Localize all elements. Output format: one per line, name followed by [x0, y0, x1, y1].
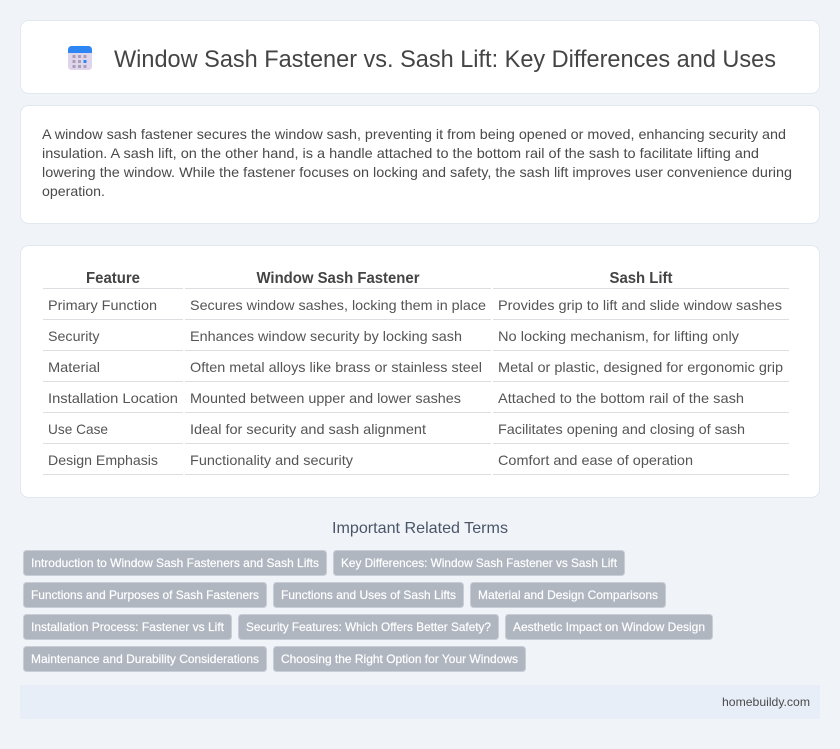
- icon: calendar window: [68, 46, 92, 70]
- footer source text: homebuildy.com: [722, 695, 810, 709]
- table header: [86, 270, 672, 287]
- tag: [506, 614, 712, 640]
- tag: [24, 582, 266, 608]
- tag: [274, 582, 464, 608]
- table row: design emphasis: Comfort and ease of operation: [498, 452, 693, 468]
- panel: comparison table: [20, 246, 820, 498]
- table header: Sash Lift: [610, 270, 672, 287]
- tag: [470, 582, 666, 608]
- tag: Functions and Purposes of Sash Fasteners: [31, 588, 259, 602]
- table row: primary function: [48, 297, 782, 313]
- tag: [334, 550, 624, 576]
- tag: Functions and Uses of Sash Lifts: [281, 588, 456, 602]
- table row: primary function: Primary Function: [48, 297, 157, 313]
- text block: introduction paragraph: insulation. A sash lift, on the other hand, is a handle attached to the bottom rail of the sash to facilitate lifting and: [42, 145, 759, 161]
- table header: Feature: [86, 270, 140, 287]
- table row: security: No locking mechanism, for lifting only: [498, 328, 739, 344]
- table row: installation location: Installation Location: [48, 390, 178, 406]
- tag: Security Features: Which Offers Better Safety?: [246, 620, 491, 634]
- table row: material: Often metal alloys like brass or stainless steel: [190, 359, 482, 375]
- text block: introduction paragraph: [42, 126, 792, 199]
- table header: Window Sash Fastener: [256, 270, 420, 287]
- table row: material: [48, 359, 783, 375]
- footer: [20, 685, 820, 719]
- table row: design emphasis: Functionality and security: [190, 452, 353, 468]
- tag: Key Differences: Window Sash Fastener vs Sash Lift: [341, 556, 618, 570]
- tag: [24, 614, 232, 640]
- heading: important related terms: Important Related Terms: [332, 520, 508, 537]
- table row: use case: Use Case: [48, 421, 108, 437]
- tag: [238, 614, 498, 640]
- tag: Installation Process: Fastener vs Lift: [31, 620, 225, 634]
- tag: Choosing the Right Option for Your Windows: [281, 652, 518, 666]
- tag: Maintenance and Durability Considerations: [31, 652, 259, 666]
- table row: material: Material: [48, 359, 100, 375]
- tag: [24, 550, 326, 576]
- text block: introduction paragraph: A window sash fastener secures the window sash, preventing it from being opened or moved, enhancing security and: [42, 126, 786, 142]
- tag: Material and Design Comparisons: [478, 588, 658, 602]
- tag: [274, 646, 526, 672]
- tag: Introduction to Window Sash Fasteners and Sash Lifts: [31, 556, 319, 570]
- tag: Aesthetic Impact on Window Design: [513, 620, 705, 634]
- table row: primary function: Secures window sashes, locking them in place: [190, 297, 486, 313]
- table row: design emphasis: Design Emphasis: [48, 452, 158, 468]
- table row: security: Security: [48, 328, 100, 344]
- table row: use case: Ideal for security and sash alignment: [190, 421, 426, 437]
- panel: header: [20, 20, 820, 94]
- text block: introduction paragraph: operation.: [42, 183, 105, 199]
- table row: primary function: Provides grip to lift and slide window sashes: [498, 297, 782, 313]
- table row: material: Metal or plastic, designed for ergonomic grip: [498, 359, 783, 375]
- table row: installation location: Attached to the bottom rail of the sash: [498, 390, 744, 406]
- table row: use case: Facilitates opening and closing of sash: [498, 421, 745, 437]
- table row: use case: [48, 421, 745, 437]
- tag: [24, 646, 266, 672]
- table row: installation location: Mounted between upper and lower sashes: [190, 390, 461, 406]
- table row: installation location: [48, 390, 744, 406]
- related terms tags: [24, 550, 712, 672]
- panel: introduction: [20, 106, 820, 224]
- table row: security: [48, 328, 739, 344]
- title: Window Sash Fastener vs. Sash Lift: Key Differences and Uses: [114, 46, 776, 73]
- table row: design emphasis: [48, 452, 693, 468]
- text block: introduction paragraph: lowering the window. While the fastener focuses on locking and safety, the sash lift improves user convenience during: [42, 164, 792, 180]
- table row: security: Enhances window security by locking sash: [190, 328, 462, 344]
